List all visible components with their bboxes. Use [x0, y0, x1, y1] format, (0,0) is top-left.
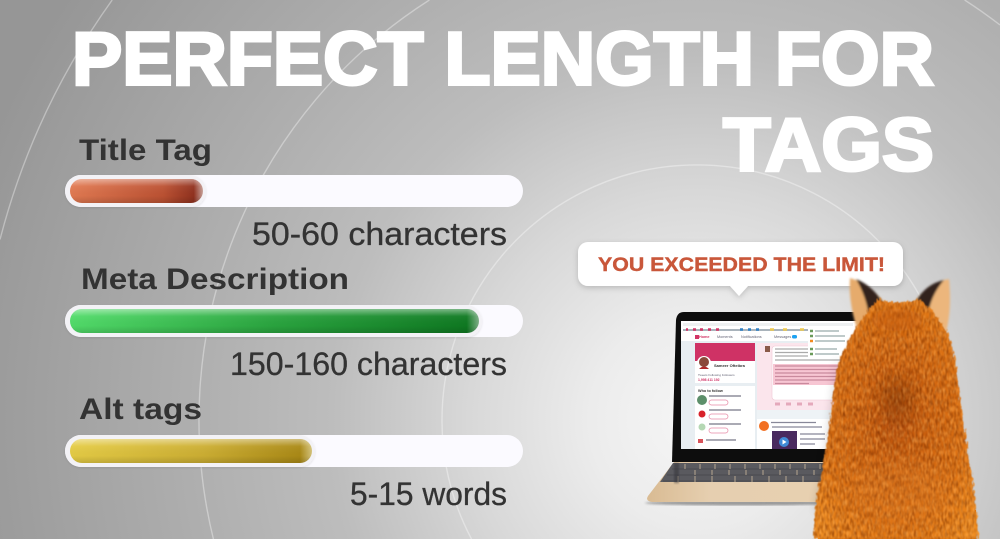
fox shadow on laptop — [816, 360, 840, 510]
who to follow card — [695, 386, 755, 449]
profile card: Sameer Ofteibra — [714, 363, 746, 368]
panel: meta description meter — [65, 263, 523, 382]
fox — [814, 278, 978, 539]
profile card — [695, 343, 755, 383]
browser toolbar: Messages — [774, 335, 791, 339]
laptop base — [647, 462, 860, 502]
profile card: Tweets Following Followers — [698, 373, 735, 377]
laptop screen bezel — [672, 312, 860, 462]
callout text: YOU EXCEEDED THE LIMIT! — [598, 254, 885, 276]
value: 50-60 characters: 50-60 characters — [252, 216, 507, 252]
laptop — [645, 312, 861, 506]
keyboard — [660, 463, 860, 483]
title — [72, 16, 934, 186]
fox fur base — [818, 510, 976, 539]
lower fur highlight — [850, 460, 950, 520]
bar: alt tags — [65, 435, 523, 467]
right ear — [912, 279, 950, 338]
heading: meta description: Meta Description — [81, 263, 349, 296]
bar: title tag — [65, 175, 523, 207]
heading: title tag: Title Tag — [79, 134, 212, 167]
who to follow card: Who to follow — [698, 389, 723, 393]
heading: alt tags: Alt tags — [79, 393, 202, 426]
profile card: 1,998 411 192 — [698, 378, 720, 382]
screen: twitter page — [681, 321, 861, 449]
title: TAGS — [723, 102, 934, 186]
value: 5-15 words: 5-15 words — [350, 476, 507, 512]
title: PERFECT LENGTH FOR — [72, 16, 934, 100]
tweet composer — [757, 343, 840, 410]
laptop shadow — [645, 500, 835, 506]
panel: alt tags meter — [65, 393, 523, 512]
bar: meta description — [65, 305, 523, 337]
browser toolbar: Moments — [717, 335, 733, 339]
browser toolbar: Home — [699, 335, 710, 339]
browser toolbar: Notifications — [741, 335, 762, 339]
tweet card — [757, 419, 830, 449]
ear base fur tint — [871, 309, 923, 331]
speech bubble — [578, 242, 903, 296]
value: 150-160 characters: 150-160 characters — [230, 346, 507, 382]
panel: title tag meter — [65, 134, 523, 252]
left ear — [850, 278, 892, 338]
neck shadow — [883, 378, 911, 418]
fox body fur — [814, 299, 978, 539]
browser toolbar — [681, 321, 861, 341]
dropdown menu — [808, 329, 848, 357]
